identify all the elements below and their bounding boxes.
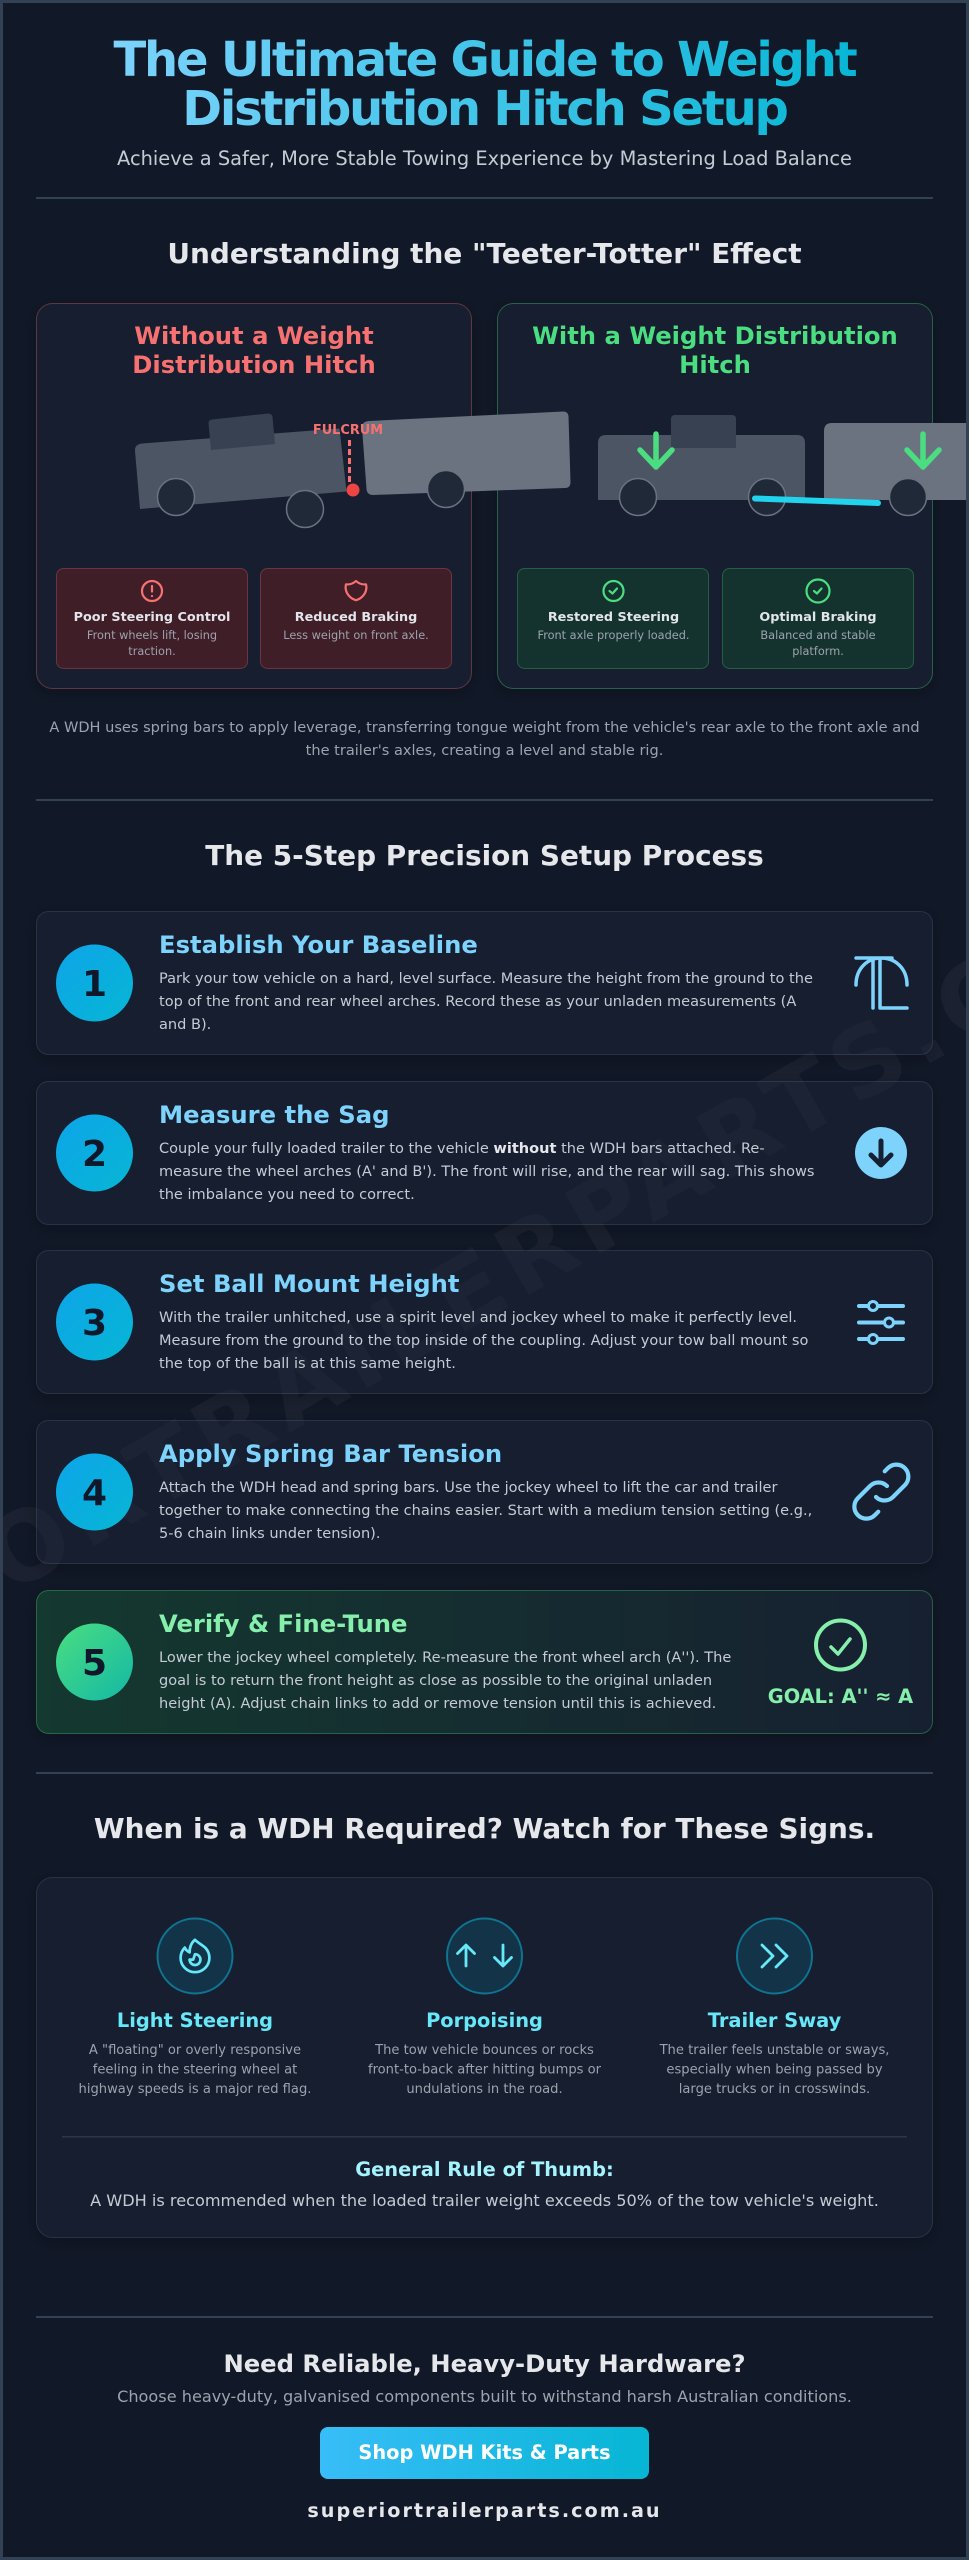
number badge: 5: [82, 1643, 107, 1684]
title: Distribution Hitch Setup: [182, 81, 788, 137]
box: poor steering: Poor Steering Control: [74, 610, 230, 625]
subtitle: Achieve a Safer, More Stable Towing Experience by Mastering Load Balance: [117, 147, 852, 170]
arrow: front axle load: [640, 434, 672, 467]
call to action text: Choose heavy-duty, galvanised components built to withstand harsh Australian conditions.: [117, 2387, 852, 2406]
sign: trailer sway: Trailer Sway: [708, 2009, 842, 2032]
box: optimal braking: Optimal Braking: [759, 610, 877, 625]
icon: shield: [346, 581, 366, 600]
icon: double chevron: [762, 1945, 787, 1967]
box: optimal braking: [722, 568, 914, 668]
rule of thumb: General Rule of Thumb:: [355, 2158, 614, 2181]
panel heading: Without a Weight: [134, 321, 374, 350]
step text: Couple your fully loaded trailer to the vehicle without the WDH bars attached. Re-: [159, 1140, 765, 1157]
box: reduced braking: [260, 568, 452, 668]
number badge: [56, 1624, 133, 1700]
explanation text: [49, 719, 920, 759]
fulcrum: FULCRUM: [313, 423, 383, 438]
box: optimal braking: Balanced and stable: [760, 629, 876, 642]
arrow: trailer axle load: [907, 434, 939, 467]
sign: light steering: A "floating" or overly responsive: [89, 2043, 301, 2058]
step text: Park your tow vehicle on a hard, level surface. Measure the height from the ground to the: [159, 970, 813, 987]
sign: trailer sway: large trucks or in crosswinds.: [679, 2082, 870, 2097]
panel heading: Distribution Hitch: [132, 350, 376, 379]
sign: light steering: Light Steering: [117, 2009, 273, 2032]
number badge: 1: [82, 964, 107, 1005]
box: restored steering: Restored Steering: [548, 610, 679, 625]
step text: [159, 970, 813, 1033]
step 5: Verify & Fine-Tune: [159, 1609, 408, 1638]
icon: chain link: [854, 1465, 908, 1519]
heading: when required: When is a WDH Required? Watch for These Signs.: [94, 1812, 875, 1845]
step 2: Measure the Sag: [159, 1100, 389, 1129]
step text: and B).: [159, 1016, 211, 1033]
step text: Attach the WDH head and spring bars. Use the jockey wheel to lift the car and trailer: [159, 1479, 777, 1496]
website: superiortrailerparts.com.au: [307, 2499, 662, 2522]
sign: porpoising: [368, 1918, 602, 2097]
step 5: [36, 1590, 933, 1734]
panel: with a WDH: [497, 303, 933, 689]
number badge: [56, 1284, 133, 1360]
box: poor steering: traction.: [128, 645, 176, 658]
diagram: level rig: [598, 415, 969, 516]
panel: warning signs: [36, 1877, 933, 2238]
icon: check circle: [806, 580, 830, 602]
panel heading: With a Weight Distribution: [532, 321, 898, 350]
step text: the top of the ball is at this same height.: [159, 1355, 456, 1372]
diagram: unbalanced rig: [135, 412, 570, 528]
step text: goal is to return the front height as close as possible to the original unladen: [159, 1672, 712, 1689]
box: optimal braking: platform.: [792, 645, 844, 658]
box: poor steering: [56, 568, 248, 668]
sign: porpoising: undulations in the road.: [406, 2082, 563, 2097]
step text: together to make connecting the chains easier. Start with a medium tension setting (e.g.,: [159, 1502, 812, 1519]
fulcrum: [313, 423, 383, 496]
step 4: [36, 1420, 933, 1564]
step text: [159, 1479, 812, 1542]
icon: alert circle: [142, 581, 162, 601]
sign: light steering: feeling in the steering wheel at: [93, 2062, 297, 2078]
call to action heading: Need Reliable, Heavy-Duty Hardware?: [223, 2349, 746, 2378]
number badge: 4: [82, 1473, 107, 1514]
panel heading: Hitch: [679, 350, 751, 379]
goal label: GOAL: A'' ≈ A: [768, 1685, 913, 1708]
icon: sliders: [859, 1302, 903, 1344]
step text: [159, 1140, 814, 1203]
step 3: Set Ball Mount Height: [159, 1269, 460, 1298]
sign: trailer sway: The trailer feels unstable or sways,: [659, 2043, 889, 2058]
box: restored steering: [518, 568, 708, 668]
panel heading: [532, 321, 898, 379]
sign: trailer sway: [659, 1918, 889, 2097]
step 3: [36, 1250, 933, 1394]
number badge: 3: [82, 1303, 107, 1344]
step text: Measure from the ground to the top inside of the coupling. Adjust your tow ball mount so: [159, 1332, 808, 1349]
number badge: 2: [82, 1134, 107, 1175]
icon: check circle: [604, 581, 624, 601]
step text: Lower the jockey wheel completely. Re-measure the front wheel arch (A''). The: [159, 1649, 731, 1666]
step text: top of the front and rear wheel arches. Record these as your unladen measurements (A: [159, 993, 796, 1010]
step text: measure the wheel arches (A' and B'). The front will rise, and the rear will sag. This shows: [159, 1163, 814, 1180]
step text: [159, 1309, 808, 1372]
rule of thumb: [90, 2158, 879, 2210]
step 2: [36, 1081, 933, 1225]
button: Shop WDH Kits & Parts: [358, 2441, 611, 2464]
icon: ruler arch: [856, 958, 907, 1008]
sign: porpoising: The tow vehicle bounces or rocks: [374, 2043, 594, 2058]
sign: porpoising: Porpoising: [426, 2009, 543, 2032]
panel heading: [132, 321, 376, 379]
rule of thumb: A WDH is recommended when the loaded trailer weight exceeds 50% of the tow vehicle's weight.: [90, 2191, 879, 2210]
truck body: [135, 428, 346, 509]
trailer: [362, 412, 570, 495]
box: poor steering: Front wheels lift, losing: [87, 629, 217, 642]
truck cab: [208, 414, 275, 450]
step text: 5-6 chain links under tension).: [159, 1525, 380, 1542]
icon: flame: [181, 1940, 209, 1972]
step 4: Apply Spring Bar Tension: [159, 1439, 502, 1468]
sign: light steering: highway speeds is a major red flag.: [79, 2082, 311, 2097]
step 1: [36, 911, 933, 1055]
step text: height (A). Adjust chain links to add or remove tension until this is achieved.: [159, 1695, 716, 1712]
step text: With the trailer unhitched, use a spirit level and jockey wheel to make it perfectly level.: [159, 1309, 797, 1326]
icon: arrow down circle: [855, 1127, 907, 1179]
title: [113, 32, 857, 137]
number badge: [56, 1454, 133, 1530]
step text: [159, 1649, 731, 1712]
step text: the imbalance you need to correct.: [159, 1186, 415, 1203]
box: restored steering: Front axle properly loaded.: [538, 629, 689, 642]
step 1: Establish Your Baseline: [159, 930, 478, 959]
heading: teeter-totter: Understanding the "Teeter-Totter" Effect: [167, 237, 802, 270]
number badge: [56, 944, 133, 1022]
sign: trailer sway: especially when being passed by: [666, 2062, 883, 2078]
icon: goal check: [816, 1620, 865, 1670]
explanation text: the trailer's axles, creating a level and stable rig.: [306, 742, 663, 759]
explanation text: A WDH uses spring bars to apply leverage, transferring tongue weight from the vehicle's rear axle to the front axle and: [49, 719, 920, 736]
number badge: [56, 1114, 133, 1192]
sign: light steering: [79, 1918, 311, 2097]
spring bar: [755, 498, 878, 503]
title: The Ultimate Guide to Weight: [113, 32, 857, 88]
sign: porpoising: front-to-back after hitting bumps or: [368, 2062, 602, 2078]
box: reduced braking: Reduced Braking: [295, 610, 417, 625]
button: [320, 2427, 649, 2479]
icon: up and down arrows: [458, 1945, 512, 1966]
box: reduced braking: Less weight on front axle.: [283, 629, 429, 642]
heading: setup process: The 5-Step Precision Setup Process: [205, 839, 764, 872]
panel: without a WDH: [36, 303, 472, 689]
